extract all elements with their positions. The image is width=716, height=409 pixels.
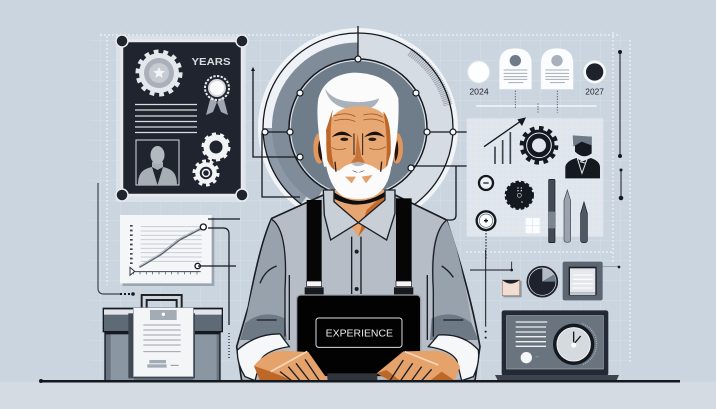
beard (325, 158, 392, 199)
desk items (470, 250, 620, 382)
pens (549, 179, 587, 243)
toolbox with document (103, 295, 222, 381)
right side indicators (618, 50, 623, 200)
right cuff and hand (377, 335, 479, 381)
card 1 (499, 48, 532, 89)
heading: years: YEARS (192, 57, 231, 68)
portrait (136, 140, 179, 185)
icon: gear (522, 129, 556, 162)
connector lines (98, 183, 240, 360)
year label 2027: 2027 (585, 87, 605, 96)
ears (313, 133, 403, 164)
tablet with experience label (297, 295, 421, 381)
suspenders (305, 198, 413, 295)
icon: large gear with star (138, 52, 180, 94)
timeline 2024 to 2027 (468, 48, 606, 113)
dial nodes (477, 176, 495, 230)
document (128, 308, 195, 378)
person head (313, 73, 403, 199)
desk line (39, 379, 680, 383)
year label 2024: 2024 (469, 87, 489, 96)
left cuff and hand (237, 334, 328, 381)
tablet with experience label: EXPERIENCE (326, 328, 393, 339)
text lines (135, 104, 197, 132)
panel: certificate (116, 35, 248, 202)
growth arrow (484, 117, 526, 164)
icon: award ribbon (205, 76, 229, 115)
neck and collar (323, 190, 395, 240)
icon: graduate (565, 135, 600, 178)
card 2 (541, 48, 573, 89)
pie chart (527, 266, 558, 297)
laptop with clock (495, 310, 619, 382)
framed picture (563, 262, 603, 300)
icon: gears (194, 134, 229, 185)
shirt (237, 195, 480, 381)
small box (502, 280, 522, 297)
hair (317, 73, 399, 167)
panel: tools and career icons (467, 117, 603, 260)
face (326, 106, 391, 185)
halo dial behind head (251, 26, 484, 228)
person torso (237, 190, 480, 381)
icon: dark cog (506, 182, 533, 209)
line chart panel (120, 215, 214, 286)
white squares (526, 218, 540, 233)
